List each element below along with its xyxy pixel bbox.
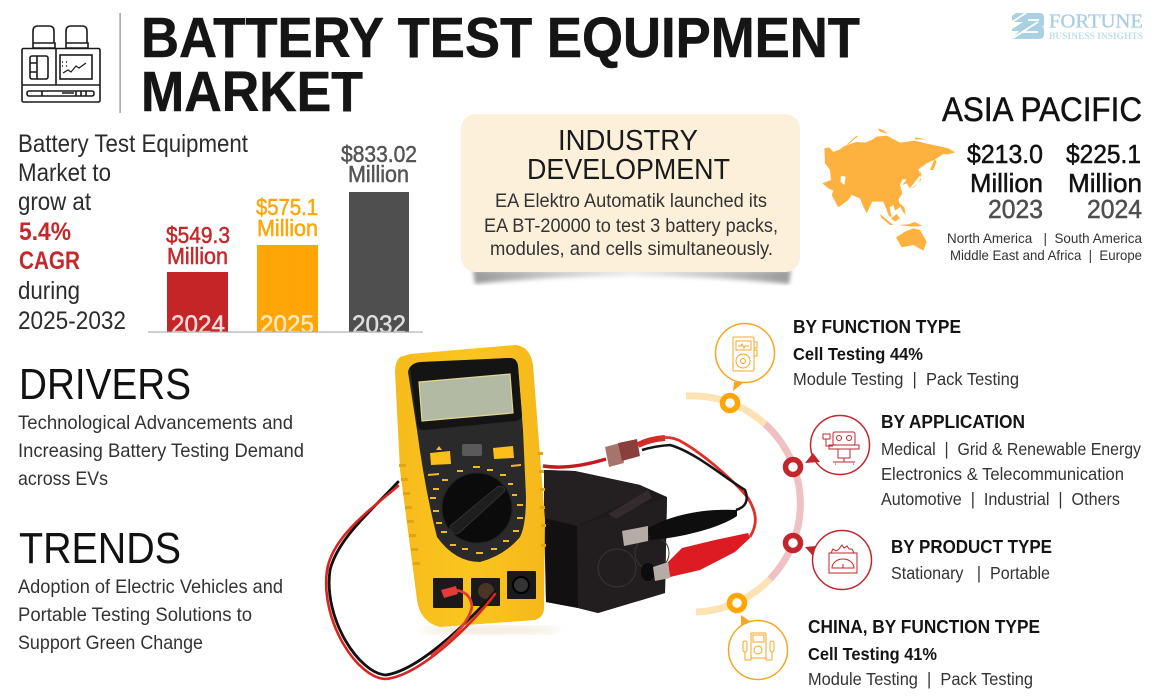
callout: by function type: BY FUNCTION TYPE	[793, 316, 961, 337]
arc timeline	[686, 396, 800, 612]
heading: Asia Pacific: ASIA PACIFIC	[942, 91, 1142, 129]
battery	[544, 470, 669, 613]
text block: Asia Pacific values: Million	[1068, 168, 1142, 198]
text block: Asia Pacific values	[947, 139, 1142, 263]
icon: battery test equipment	[22, 26, 100, 102]
icon: handheld tester	[716, 324, 774, 391]
callout: by application	[805, 411, 1141, 509]
icon: meter with probes	[728, 615, 788, 680]
text block: drivers: DRIVERS	[19, 360, 191, 409]
callout: by application: Automotive | Industrial | Others	[881, 489, 1120, 509]
text block: drivers: across EVs	[18, 468, 108, 490]
logo: Fortune Business Insights	[1012, 10, 1143, 42]
bar 2024: 2024	[171, 311, 225, 339]
text block: trends: Portable Testing Solutions to	[18, 604, 252, 626]
icon: test robot	[805, 416, 870, 474]
title: BATTERY TEST EQUIPMENT	[141, 6, 860, 70]
text block: Asia Pacific values: $225.1	[1066, 139, 1141, 169]
panel: industry development: EA Elektro Automatik launched its	[495, 191, 767, 212]
callout: by product type	[805, 530, 1052, 590]
divider	[120, 13, 121, 113]
logo: Fortune Business Insights: BUSINESS INSIGHTS	[1049, 32, 1143, 42]
text block: drivers: Technological Advancements and	[18, 412, 293, 434]
title	[141, 6, 860, 124]
bar 2032: 2032	[352, 311, 406, 339]
map: Asia Pacific	[822, 128, 955, 251]
text block: trends: Support Green Change	[18, 632, 203, 654]
panel: industry development: DEVELOPMENT	[527, 154, 730, 186]
text block: CAGR statement: during	[18, 277, 80, 305]
text block: trends	[18, 524, 283, 654]
right cables and connector	[543, 438, 755, 537]
text block: CAGR statement: grow at	[18, 188, 91, 216]
title: MARKET	[141, 60, 363, 124]
text block: Asia Pacific values: 2023	[988, 194, 1043, 224]
bar 2025	[256, 194, 318, 339]
text block: Asia Pacific values: Middle East and Africa | Europe	[950, 247, 1142, 263]
bar 2025: 2025	[260, 311, 314, 339]
text block: Asia Pacific values: Million	[970, 168, 1043, 198]
callout: by product type: Stationary | Portable	[891, 563, 1050, 583]
callout: by product type: BY PRODUCT TYPE	[891, 536, 1052, 557]
bar 2032: $833.02	[341, 141, 417, 167]
callout: by function type: Cell Testing 44%	[793, 344, 923, 364]
text block: CAGR statement: CAGR	[19, 247, 80, 275]
logo: Fortune Business Insights: FORTUNE	[1049, 10, 1143, 32]
callout: by function type: Module Testing | Pack Testing	[793, 369, 1019, 389]
icon: battery gauge	[805, 530, 872, 590]
bar 2032	[341, 141, 417, 339]
bar 2024	[166, 222, 230, 339]
callout: by application: BY APPLICATION	[881, 411, 1025, 432]
text block: trends: Adoption of Electric Vehicles and	[18, 576, 283, 598]
alligator clips	[622, 510, 750, 581]
text block: CAGR statement: Market to	[18, 159, 111, 187]
photo: multimeter connected to battery	[326, 345, 755, 679]
callout: China by function type: Module Testing | Pack Testing	[808, 669, 1033, 689]
bar 2025: Million	[257, 215, 318, 241]
bar 2032: Million	[348, 161, 409, 187]
text block: Asia Pacific values: 2024	[1087, 194, 1142, 224]
text block: CAGR statement: 5.4%	[19, 218, 71, 246]
text block: drivers	[18, 360, 304, 490]
panel: industry development: modules, and cells simultaneously.	[490, 239, 773, 260]
bar 2025: $575.1	[256, 194, 318, 220]
bar 2024: Million	[167, 243, 228, 269]
left test leads	[326, 482, 495, 679]
callout: by function type	[716, 316, 1019, 391]
text block: CAGR statement: Battery Test Equipment	[18, 130, 248, 158]
text block: drivers: Increasing Battery Testing Demand	[18, 440, 304, 462]
panel: industry development: EA BT-20000 to test 3 battery packs,	[484, 216, 778, 237]
callout: by application: Medical | Grid & Renewable Energy	[881, 439, 1141, 459]
callout: by application: Electronics & Telecommunication	[881, 464, 1124, 484]
text block: CAGR statement: 2025-2032	[18, 307, 126, 335]
panel: industry development: INDUSTRY	[558, 125, 698, 157]
text block: Asia Pacific values: North America | South America	[947, 230, 1142, 246]
callout: China by function type: CHINA, BY FUNCTION TYPE	[808, 616, 1040, 637]
text block: trends: TRENDS	[19, 524, 181, 573]
panel: industry development	[461, 114, 800, 284]
callout: China by function type: Cell Testing 41%	[808, 644, 937, 664]
bar chart	[148, 141, 423, 339]
text block: Asia Pacific values: $213.0	[967, 139, 1043, 169]
bar 2024: $549.3	[166, 222, 230, 248]
multimeter body	[395, 345, 546, 627]
text block: CAGR statement	[18, 130, 248, 335]
callout: China by function type	[728, 615, 1040, 689]
